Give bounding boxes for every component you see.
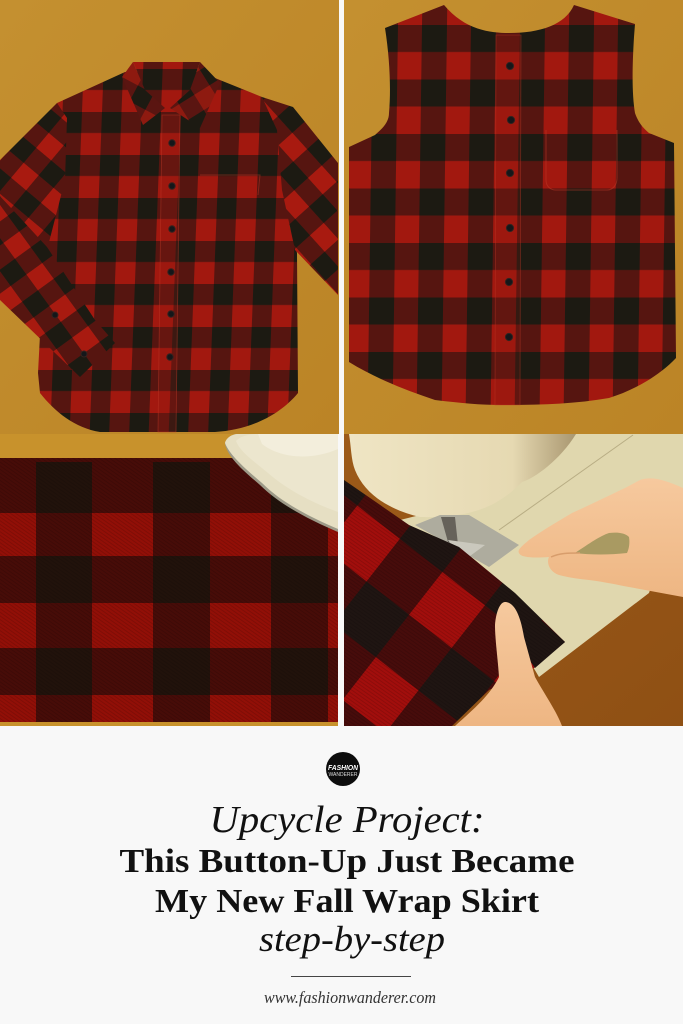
pressed plaid fabric xyxy=(0,458,338,722)
shirt right sleeve xyxy=(262,97,338,295)
bed seam line xyxy=(499,435,633,530)
subtitle: step-by-step: step-by-step xyxy=(259,919,445,959)
logo badge xyxy=(326,752,360,786)
machine head xyxy=(349,434,576,517)
title block xyxy=(120,843,574,920)
title line: My New Fall Wrap Skirt: My New Fall Wrap Skirt xyxy=(155,883,540,920)
vest body xyxy=(349,5,676,405)
logo badge: WANDERER xyxy=(328,772,358,778)
title line: This Button-Up Just Became: This Button-Up Just Became xyxy=(120,843,574,880)
metal needle plate xyxy=(415,515,519,567)
shirt left sleeve upper xyxy=(0,103,67,250)
panel: original flannel shirt xyxy=(0,0,339,434)
panel: sleeveless vest cut from shirt xyxy=(344,0,683,434)
panel: pressing fabric with iron xyxy=(0,434,338,726)
left thumb xyxy=(455,602,562,726)
finger crease xyxy=(551,553,580,557)
machine bed xyxy=(400,434,683,677)
shirt left sleeve lower and cuff xyxy=(0,196,115,377)
logo badge: FASHION xyxy=(328,765,359,772)
plaid fabric under needle xyxy=(344,480,565,726)
presser foot xyxy=(441,517,485,556)
shirt placket xyxy=(158,115,180,432)
divider xyxy=(291,976,411,977)
shirt pocket xyxy=(200,175,260,195)
website url: www.fashionwanderer.com xyxy=(264,988,436,1007)
iron xyxy=(225,434,338,532)
shirt buttons xyxy=(52,140,175,360)
panel: sewing the fabric xyxy=(344,434,683,726)
title line: Upcycle Project: Upcycle Project: xyxy=(210,799,484,841)
vest pocket xyxy=(546,130,617,190)
shirt body xyxy=(38,72,298,432)
shirt collar xyxy=(122,62,220,128)
right hand xyxy=(519,478,683,597)
vest buttons xyxy=(505,62,515,341)
vest placket xyxy=(495,35,521,405)
gap between fingers xyxy=(575,533,629,554)
